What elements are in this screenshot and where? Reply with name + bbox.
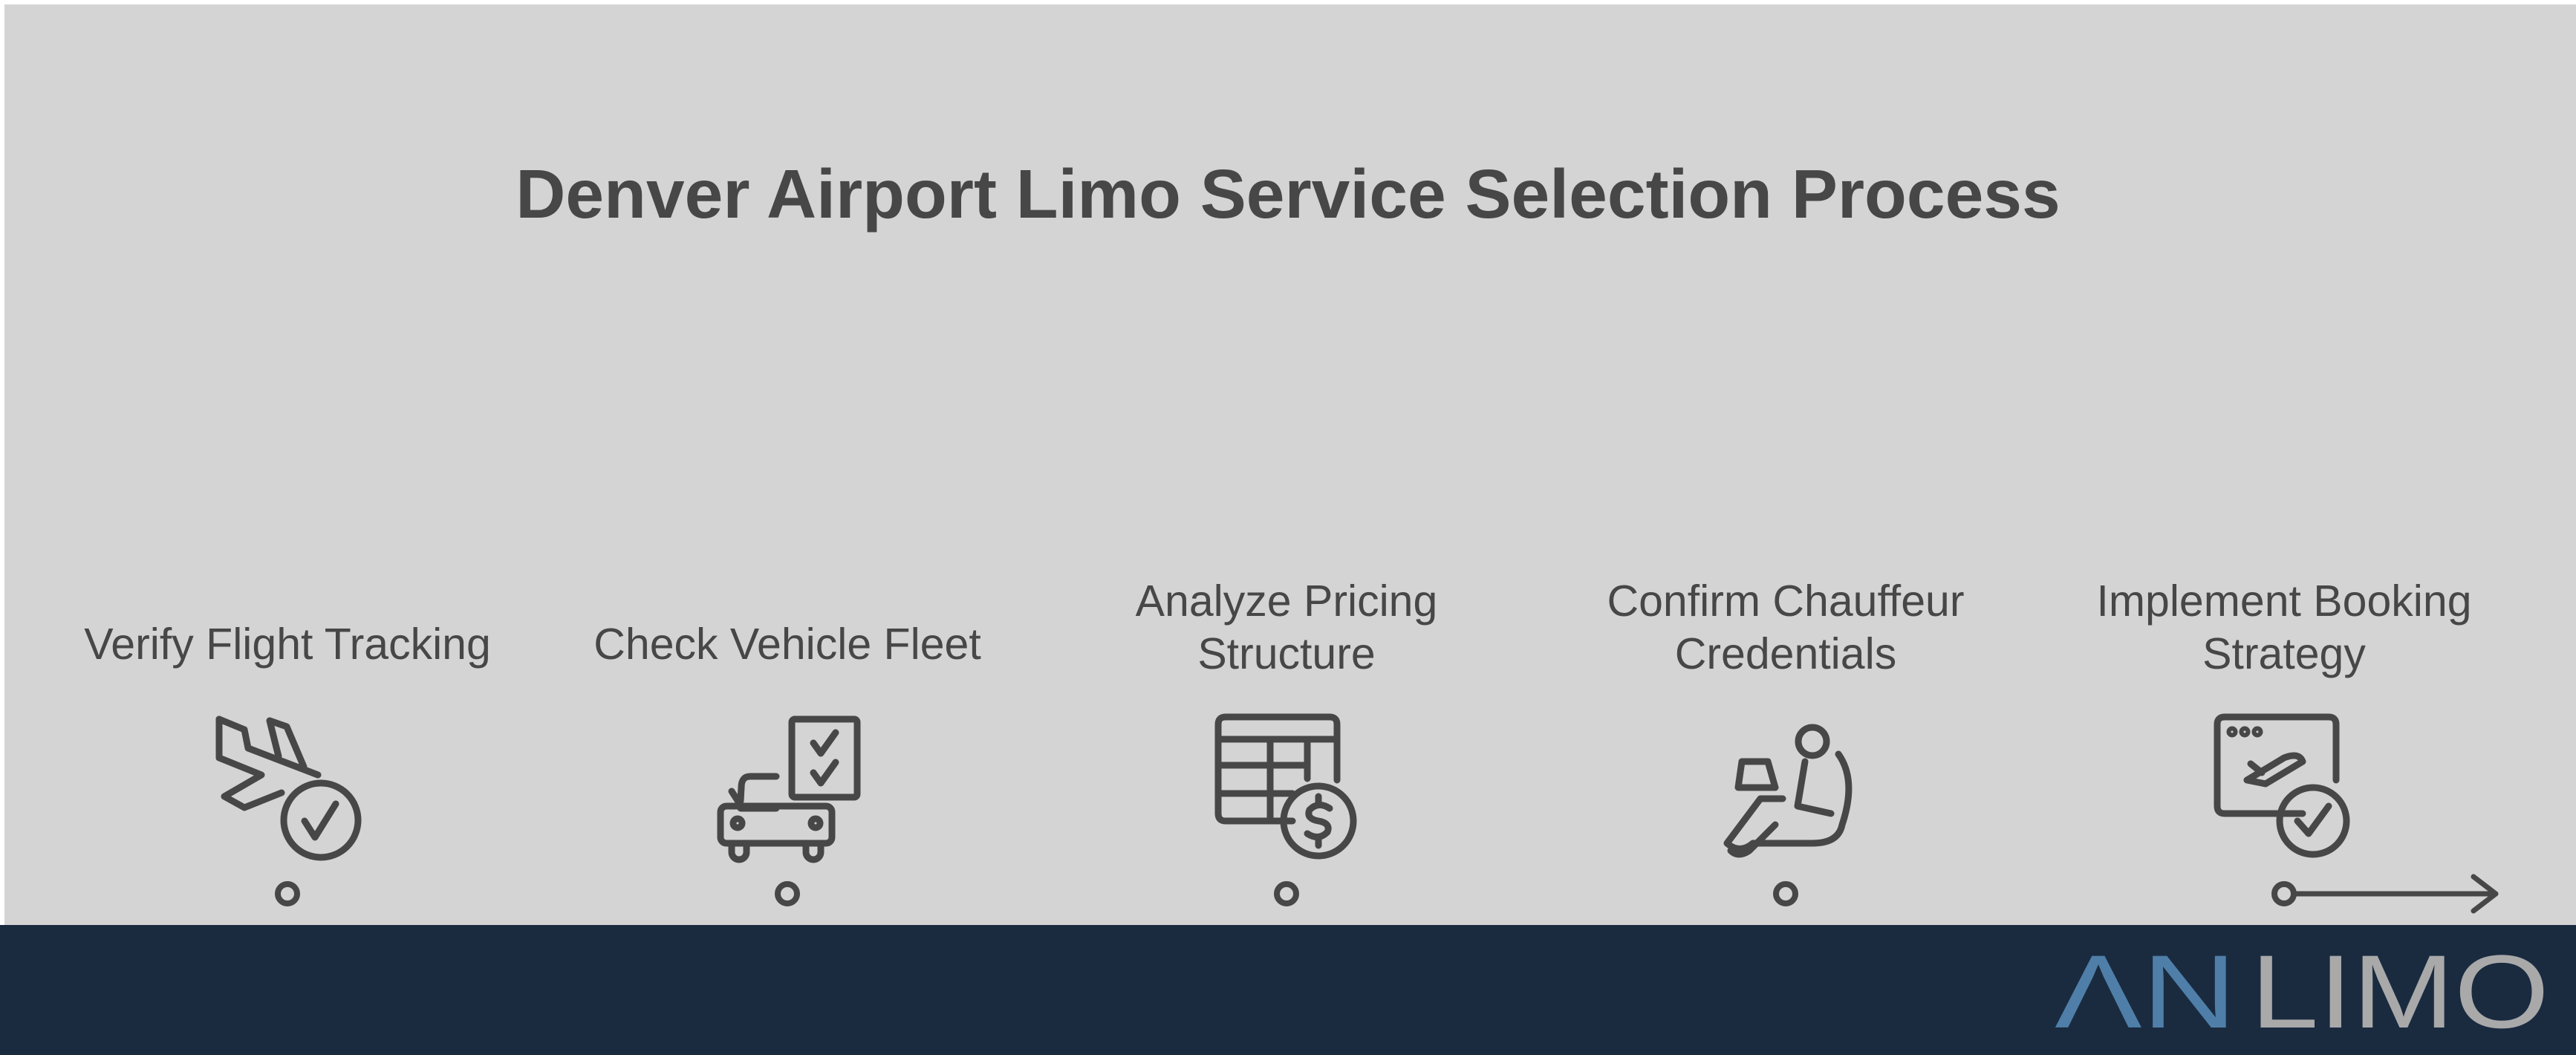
label: step 3: [1135, 577, 1437, 678]
label: step 4: Confirm Chauffeur: [1607, 577, 1964, 626]
label: step 4: Credentials: [1675, 629, 1896, 678]
icon: car with checklist: [721, 719, 857, 860]
title: Denver Airport Limo Service Selection Process: [515, 155, 2061, 233]
icon: chauffeur seated with laptop: [1727, 727, 1849, 854]
label: step 3: Analyze Pricing: [1136, 577, 1437, 626]
logo: LIMO: [2251, 933, 2549, 1050]
logo: ΛN: [2055, 933, 2237, 1050]
label: step 5: [2096, 577, 2472, 678]
icon: booking screen with check: [2217, 717, 2346, 854]
timeline dots and arrow: [278, 877, 2496, 911]
label: step 5: Strategy: [2202, 629, 2366, 678]
label: step 3: Structure: [1197, 629, 1376, 678]
label: step 5: Implement Booking: [2096, 577, 2472, 626]
label: step 4: [1607, 577, 1964, 678]
icon: pricing table with dollar: [1218, 717, 1353, 856]
icon: plane with check: [219, 719, 358, 857]
label: step 1: Verify Flight Tracking: [84, 620, 491, 669]
label: step 2: Check Vehicle Fleet: [593, 620, 981, 669]
footer bar: [0, 925, 2576, 1055]
